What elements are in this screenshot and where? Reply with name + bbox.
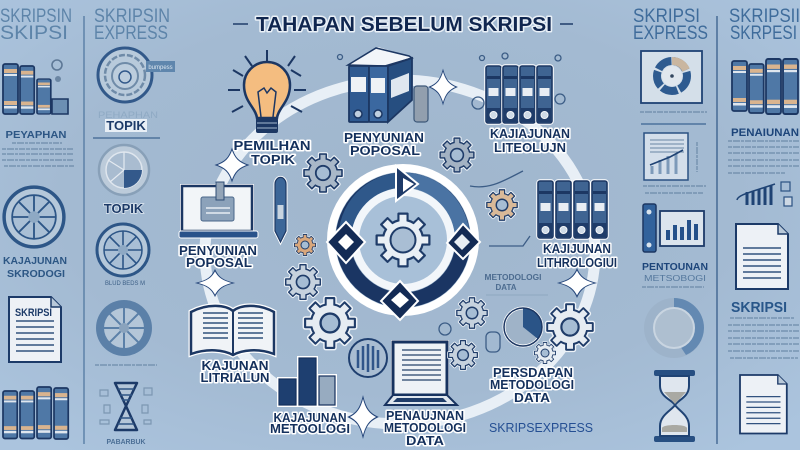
right side panel [633,6,800,444]
label: topik highlighted: PEHAPHAN [98,110,158,121]
white process ring [205,80,595,424]
step: laptop bottom [384,342,466,448]
small caption: metodologi data: DATA [495,283,517,292]
icon: circle with bars [349,339,387,377]
center gear [376,212,430,268]
label: peyaphan [2,129,74,166]
step: open book: LITRIALUN [200,371,270,385]
label: kajajunan skrodogi: KAJAJUNAN [3,255,67,267]
label: topik: TOPIK [104,201,144,216]
icon: pen [275,177,286,242]
icon: round gauge [644,298,704,358]
step: binders: POPOSAL [350,144,420,158]
brand: SKRIPSEXPRESS [489,421,593,435]
central cycle [327,164,480,320]
icon: dial: bumpess [148,65,173,71]
right panel heading 1: EXPRESS [633,23,708,44]
step: books right: KAJIJUNAN [543,242,611,256]
small caption: metodologi data [484,273,548,295]
icon: document lower [740,375,787,434]
label: skripsi [728,299,800,358]
icon: pie circle [99,145,149,195]
caption: PABARBUK [106,439,146,446]
icon: pie chart [504,308,542,346]
icon: small bar chart [737,182,792,206]
small decorations [338,53,565,352]
arrow head: top [396,166,418,201]
icon: hourglass right [654,370,695,442]
icon: skripsi document [9,297,61,362]
arrow head: right [447,224,480,259]
label: penaiunan [728,127,800,173]
step label: persdapan metodologi data: PERSDAPAN [493,366,573,380]
step: laptop bottom: PENAUJNAN [386,409,464,423]
icon: document [736,224,788,289]
label: kajajunan skrodogi [3,255,67,280]
step: laptop bottom: DATA [406,434,444,448]
microtext [643,186,706,193]
card: line chart [644,133,697,180]
step: bar chart [270,357,350,436]
step: laptop left [179,182,258,270]
label: peyaphan: PEYAPHAN [6,129,66,141]
step: books top right: LITEOLUJN [494,141,566,155]
step: laptop left: PENYUNIAN [179,244,257,258]
microtext [95,364,157,366]
step: books right [537,181,617,270]
icon: wheel 2 [96,300,152,356]
icon: books top left [3,60,68,114]
left panel heading 1: SKIPSI [0,23,68,44]
right panel heading 2 [729,6,800,44]
icon: wheel left [4,187,64,247]
label: pentounan [642,261,708,287]
label: penaiunan: PENAIUNAN [731,127,799,139]
right panel heading 1: SKRIPSI [633,6,700,27]
icon: binder and chart [643,204,704,252]
gears [285,137,594,370]
step label: persdapan metodologi data: METODOLOGI [490,378,574,392]
step: laptop left: POPOSAL [186,256,252,270]
step: binders: PENYUNIAN [344,131,424,145]
left panel divider [83,16,85,444]
label: skripsi: SKRIPSI [731,299,787,316]
icon: books top right [732,59,798,114]
step: bulb: TOPIK [251,153,295,167]
separator [93,137,160,139]
left panel heading 2 [94,6,170,44]
step: open book [191,306,274,385]
step: laptop bottom: METODOLOGI [384,421,466,435]
step: books top right [486,66,570,155]
step label: persdapan metodologi data [490,366,574,405]
arrow head: bottom [381,281,418,320]
left panel heading 1: SKRIPSIN [0,6,72,27]
step: bar chart: METOOLOGI [270,422,350,436]
icon: skripsi document: SKRIPSI [15,307,52,319]
step: books right: LITHROLOGIUI [537,256,617,270]
step: open book: KAJUNAN [202,359,268,373]
step: bulb: PEMILHAN [234,139,310,153]
left panel heading 2: EXPRESS [94,23,168,44]
small caption: metodologi data: METODOLOGI [484,273,542,282]
label: topik highlighted [98,110,158,133]
arrow head: left [327,222,365,263]
microtext [640,111,707,113]
step label: persdapan metodologi data: DATA [514,391,550,405]
right panel heading 1 [633,6,708,44]
icon: dial [98,48,175,102]
icon: wheel 1 [97,224,149,276]
stars [197,70,595,437]
step: bulb [228,50,310,167]
icon: books bottom left [3,387,68,439]
step: bar chart: KAJAJUNAN [274,411,346,425]
separator [641,123,706,125]
label: kajajunan skrodogi: SKRODOGI [7,268,65,280]
step: binders [344,47,428,158]
left panel heading 2: SKRIPSIN [94,6,170,27]
step: books top right: KAJIAJUNAN [490,127,570,141]
label: pentounan: METSOBOGI [644,274,706,283]
title: TAHAPAN SEBELUM SKRIPSI [256,14,552,36]
left side panel [0,6,175,446]
icon: hourglass left [100,383,152,430]
caption: BLUD BEDS M [105,280,145,287]
label: pentounan: PENTOUNAN [642,261,708,273]
label: topik highlighted: TOPIK [106,118,146,133]
right panel divider [716,16,718,444]
left panel heading 1 [0,6,72,44]
card: donut [641,51,702,103]
